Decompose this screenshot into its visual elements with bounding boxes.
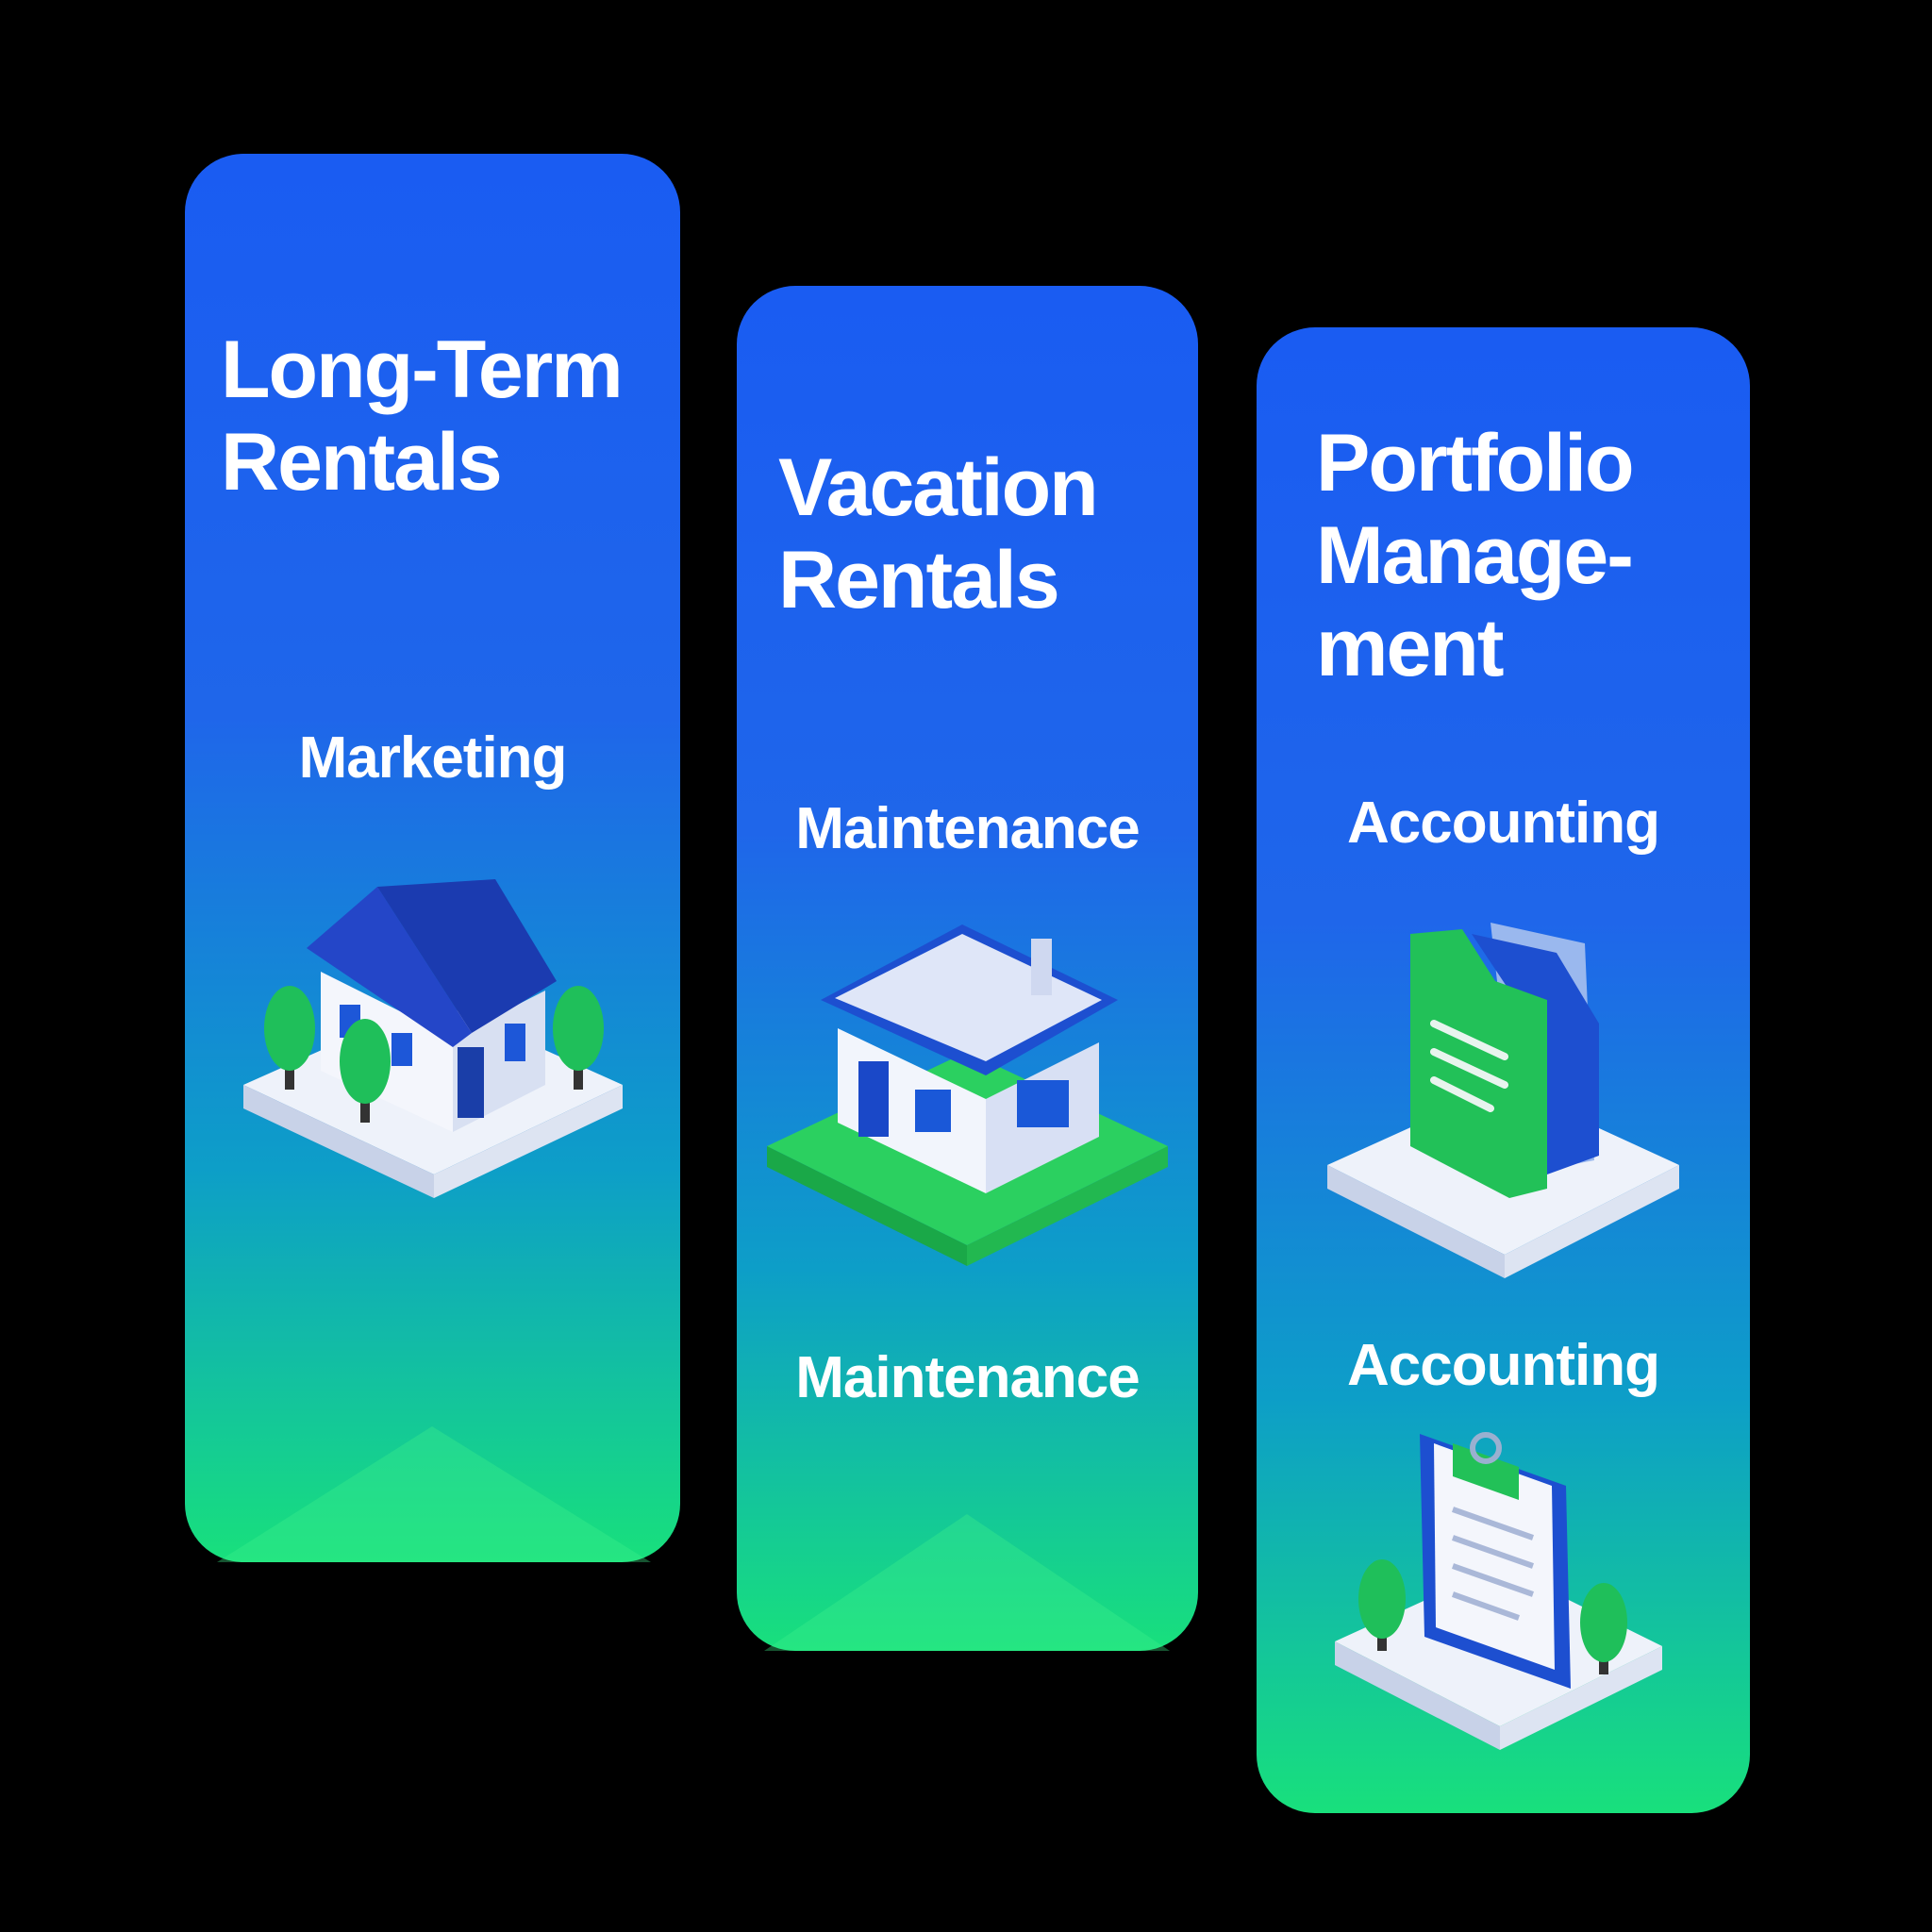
title: Vacation Rentals: Rentals bbox=[778, 535, 1058, 625]
icon: panel 2 bottom chevron bbox=[764, 1514, 1170, 1651]
title: Long-Term Rentals: Rentals bbox=[221, 417, 501, 508]
label: Maintenance bottom: Maintenance bbox=[795, 1345, 1140, 1410]
panel: portfolio management bbox=[1257, 327, 1750, 1813]
icon: accounting folder bbox=[1327, 923, 1679, 1278]
icon: vacation house bbox=[767, 924, 1168, 1266]
label: Marketing: Marketing bbox=[299, 725, 566, 791]
title: Long-Term Rentals bbox=[221, 325, 622, 508]
label: Accounting top: Accounting bbox=[1347, 791, 1659, 856]
title: Long-Term Rentals: Long-Term bbox=[221, 325, 622, 415]
title: Vacation Rentals: Vacation bbox=[778, 442, 1097, 533]
title: Vacation Rentals bbox=[778, 442, 1097, 625]
icon: panel 1 bottom chevron bbox=[217, 1426, 651, 1562]
label: Accounting bottom: Accounting bbox=[1347, 1333, 1659, 1398]
panel: long-term rentals bbox=[185, 154, 680, 1562]
title: Portfolio Management: Portfolio bbox=[1316, 418, 1632, 508]
title: Portfolio Management: Manage- bbox=[1316, 510, 1632, 601]
title: Portfolio Management bbox=[1316, 418, 1632, 693]
icon: long-term house bbox=[243, 879, 623, 1198]
panel: vacation rentals bbox=[737, 286, 1198, 1651]
label: Maintenance top: Maintenance bbox=[795, 796, 1140, 861]
icon: clipboard bbox=[1335, 1434, 1662, 1750]
title: Portfolio Management: ment bbox=[1316, 603, 1502, 693]
